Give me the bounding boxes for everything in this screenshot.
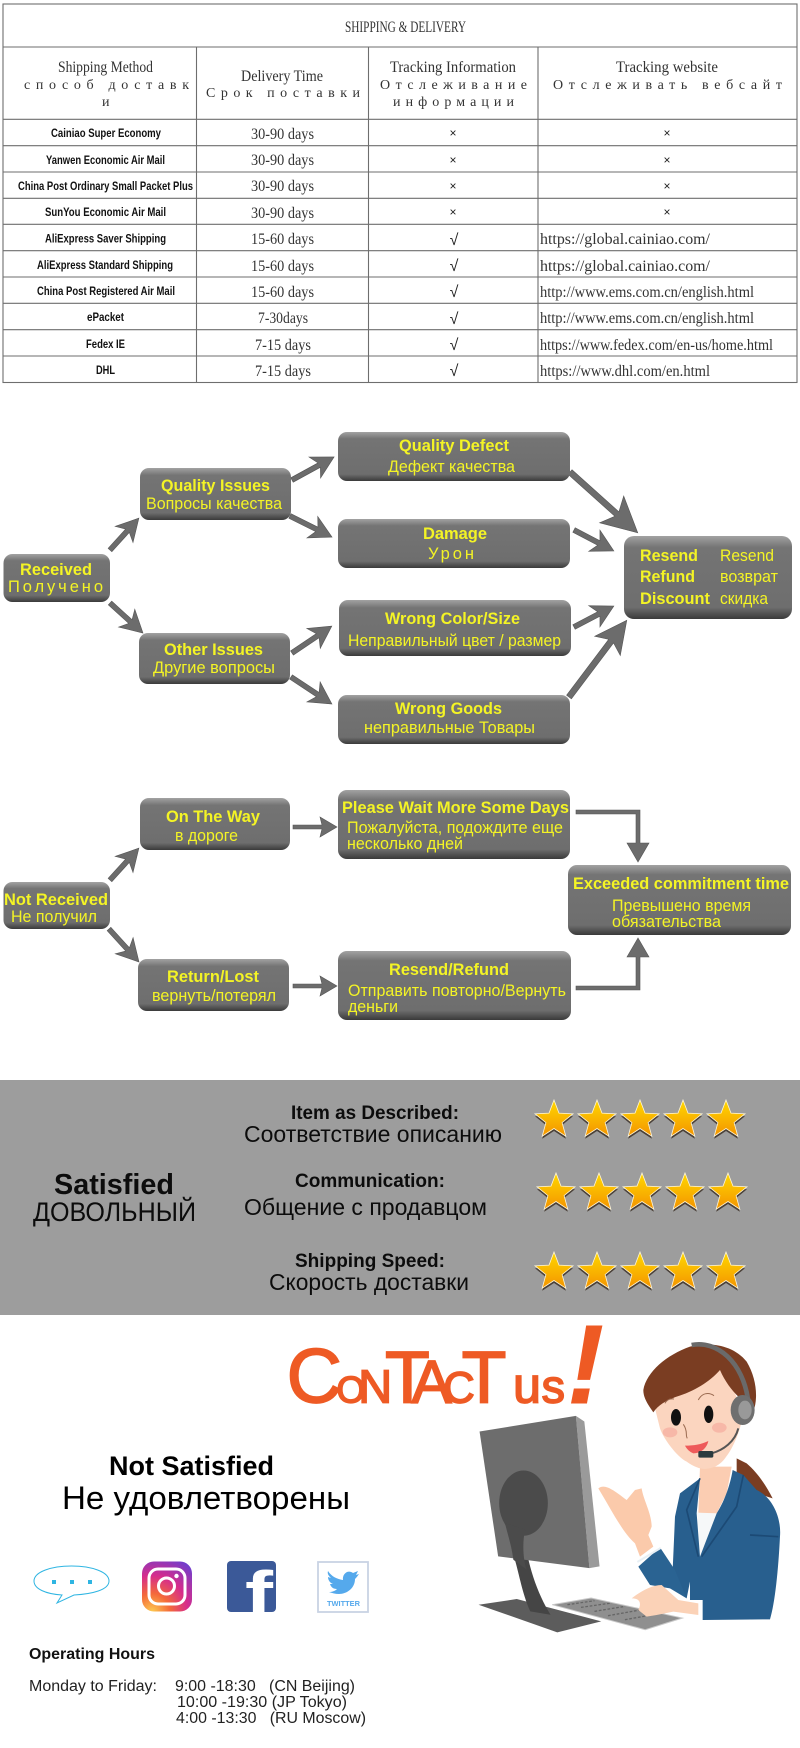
shipping method names: Cainiao Super Economy [51,128,161,140]
delivery times: 7-15 days [255,363,311,380]
tracking marks: × [663,153,671,167]
tracking websites [540,231,773,380]
tracking marks: √ [450,258,459,275]
icon: twitter: TWITTER [327,1601,360,1608]
rating label: communication: Общение с продавцом [244,1194,487,1220]
node: Please Wait [338,790,570,859]
node: Please Wait: Please Wait More Some Days [342,798,569,817]
delivery times: 30-90 days [251,152,314,169]
text: operating hours [29,1646,366,1727]
logo: Contact us: s [542,1360,565,1412]
tracking marks [449,126,671,380]
lapels [687,1475,778,1557]
delivery times: 15-60 days [251,258,314,275]
node: Not Received [4,882,110,929]
flow arrows: received [101,446,650,714]
tracking websites: https://global.cainiao.com/ [540,258,711,275]
logo: Contact us [287,1301,604,1428]
icon: instagram [142,1562,192,1612]
face [655,1368,743,1469]
tracking websites: http://www.ems.com.cn/english.html [540,310,754,327]
text: operating hours: 9:00 -18:30 (CN Beijing) [175,1678,355,1695]
monitor [479,1416,601,1632]
tracking marks: × [663,179,671,193]
typing hand [632,1585,698,1617]
logo: Contact us: T [385,1336,430,1418]
node: Please Wait: Пожалуйста, подождите еще [347,819,563,837]
icon: facebook [227,1561,276,1612]
panel: not satisfied contact [29,1301,780,1727]
node: Wrong Color/Size [339,600,571,656]
delivery times: 30-90 days [251,126,314,143]
node: Exceeded commitment time: обязательства [612,913,722,931]
heading: Not Satisfied: Not Satisfied [109,1451,274,1481]
headset [692,1344,755,1458]
text: operating hours: 4:00 -13:30 (RU Moscow) [176,1710,366,1727]
node: Not Received: Not Received [4,890,108,909]
node: Damage: Damage [423,524,487,543]
agent head [643,1344,756,1469]
node: Resend / Refund / Discount: Discount [640,589,710,608]
heading: Not Satisfied [62,1451,350,1516]
stars row 2 [537,1173,747,1212]
table header row: Tracking website [616,59,718,76]
node: Return/Lost: Return/Lost [167,967,259,986]
tracking marks: × [449,153,457,167]
table header row: Delivery Time [241,68,323,85]
ponytail [737,1458,773,1498]
tracking marks: × [449,205,457,219]
shipping method names: Fedex IE [86,339,125,351]
raised hand [598,1487,653,1557]
node: Other Issues: Другие вопросы [153,659,275,677]
heading: Not Satisfied: Не удовлетворены [62,1480,350,1516]
panel: received flowchart [4,432,792,744]
node: Not Received: Не получил [11,908,97,926]
node: Damage [338,519,570,568]
tracking marks: √ [450,337,459,354]
node: Please Wait: несколько дней [347,835,463,853]
tracking marks: √ [450,232,459,249]
cheeks [663,1427,677,1437]
text: operating hours: Monday to Friday: [29,1678,157,1695]
logo: Contact us: A [412,1348,452,1415]
node: On The Way: On The Way [166,807,261,826]
node: Return/Lost: вернуть/потерял [152,987,276,1005]
neck [698,1467,732,1513]
panel: satisfied ratings [0,1080,800,1315]
heading: Satisfied [33,1169,196,1227]
rating label: shipping speed: Shipping Speed: [295,1251,445,1272]
logo: Contact us: u [499,1357,541,1413]
node: Wrong Goods [338,695,570,744]
node: Resend / Refund / Discount: скидка [720,590,769,608]
table header row: и [102,95,110,110]
tracking marks: × [449,179,457,193]
node: Resend / Refund / Discount [624,536,792,619]
node: Resend/Refund: деньги [348,998,398,1016]
rating label: item as described [244,1103,502,1147]
agent body [598,1458,780,1620]
table header row: Срок поставки [206,86,360,101]
delivery times: 15-60 days [251,284,314,301]
delivery times: 7-30days [258,310,308,327]
shipping method names [18,128,193,377]
shirt [697,1513,717,1557]
tracking marks: × [663,126,671,140]
flow arrows: not received [100,810,649,996]
node: Received: Получено [8,578,103,596]
logo: Contact us: C [443,1364,475,1412]
shipping method names: China Post Registered Air Mail [37,286,175,298]
rating label: shipping speed [269,1251,469,1295]
node: Resend/Refund [338,951,571,1020]
node: Resend / Refund / Discount: Refund [640,567,695,586]
node: Other Issues: Other Issues [164,640,263,659]
logo: Contact us: ! [567,1301,604,1428]
node: Exceeded commitment time: Превышено время [612,897,751,915]
rating label: communication: Communication: [295,1171,445,1192]
sleeve [638,1547,687,1598]
logo: Contact us: N [358,1360,392,1412]
shipping method names: AliExpress Saver Shipping [45,234,166,246]
shipping method names: China Post Ordinary Small Packet Plus [18,181,193,193]
table header row: способ доставк [24,78,189,93]
logo: Contact us: O [337,1369,365,1410]
heading: Satisfied: Satisfied [54,1169,174,1201]
tracking marks: √ [450,284,459,301]
node: Wrong Color/Size: Wrong Color/Size [385,609,520,628]
rating label: item as described: Соответствие описанию [244,1121,502,1147]
text: operating hours: Operating Hours [29,1646,155,1663]
node: Resend/Refund: Resend/Refund [389,960,509,979]
shipping method names: Yanwen Economic Air Mail [46,155,165,167]
cuff [637,1548,661,1562]
table header row: Tracking Information [390,59,516,76]
node: Quality Issues [140,468,291,520]
icon: twitter [318,1562,368,1612]
shipping method names: AliExpress Standard Shipping [37,260,173,272]
node: On The Way: в дороге [175,827,238,845]
delivery times: 7-15 days [255,337,311,354]
text: operating hours: 10:00 -19:30 (JP Tokyo) [177,1694,347,1711]
keyboard [552,1598,682,1630]
icon: facebook: f [245,1558,274,1630]
rating label: item as described: Item as Described: [291,1103,459,1124]
table header row: Отслеживать вебсайт [553,78,782,93]
shipping method names: ePacket [87,312,124,324]
rating label: communication [244,1171,487,1220]
node: Received [4,554,110,602]
node: On The Way [140,798,290,850]
stars row 3 [535,1252,745,1291]
node: Resend / Refund / Discount: Resend [720,547,774,565]
tracking marks: × [449,126,457,140]
tracking websites: https://www.fedex.com/en-us/home.html [540,337,773,354]
table title: SHIPPING & DELIVERY [345,19,466,36]
node: Wrong Color/Size: Неправильный цвет / размер [348,632,561,650]
node: Resend / Refund / Discount: Resend [640,546,698,565]
panel: shipping table [3,4,797,382]
node: Wrong Goods: Wrong Goods [395,699,502,718]
icon: chat bubble [34,1566,109,1603]
hair [643,1345,756,1412]
tracking websites: http://www.ems.com.cn/english.html [540,284,754,301]
node: Quality Defect [338,432,570,481]
illustration: support agent at computer [479,1344,780,1632]
rating label: shipping speed: Скорость доставки [269,1269,469,1295]
node: Exceeded commitment time [568,865,791,935]
grey band [0,1080,800,1315]
node: Other Issues [139,633,290,684]
logo: Contact us: C [287,1334,342,1419]
delivery times: 30-90 days [251,178,314,195]
node: Quality Defect: Quality Defect [399,436,509,455]
delivery times: 30-90 days [251,205,314,222]
tracking marks: × [663,205,671,219]
node: Received: Received [20,560,92,579]
delivery times: 15-60 days [251,231,314,248]
table header row [24,59,782,110]
table grid [3,4,797,382]
node: Damage: Урон [428,545,474,563]
tracking websites: https://www.dhl.com/en.html [540,363,710,380]
shipping method names: DHL [96,365,115,377]
tracking marks: √ [450,311,459,328]
node: Resend/Refund: Отправить повторно/Вернуть [348,982,566,1000]
node: Exceeded commitment time: Exceeded commitment time [573,874,789,893]
stars row 1 [535,1100,745,1139]
node: Quality Issues: Вопросы качества [146,495,283,513]
delivery times [251,126,314,380]
jacket [673,1470,780,1620]
table header row: Shipping Method [58,59,153,76]
node: Quality Defect: Дефект качества [388,458,516,476]
logo: Contact us: T [462,1336,506,1418]
tracking marks: √ [450,363,459,380]
node: Resend / Refund / Discount: возврат [720,568,778,586]
table header row: Отслеживание [380,78,527,93]
brow and nose [665,1394,714,1438]
node: Wrong Goods: неправильные Товары [364,719,535,737]
heading: Satisfied: ДОВОЛЬНЫЙ [33,1196,196,1227]
table header row: информации [393,95,514,110]
shipping method names: SunYou Economic Air Mail [45,207,166,219]
node: Return/Lost [138,959,289,1011]
eyes [671,1409,681,1426]
node: Quality Issues: Quality Issues [161,476,270,495]
panel: not received flowchart [4,790,791,1020]
tracking websites: https://global.cainiao.com/ [540,231,711,248]
mouth [685,1441,708,1453]
